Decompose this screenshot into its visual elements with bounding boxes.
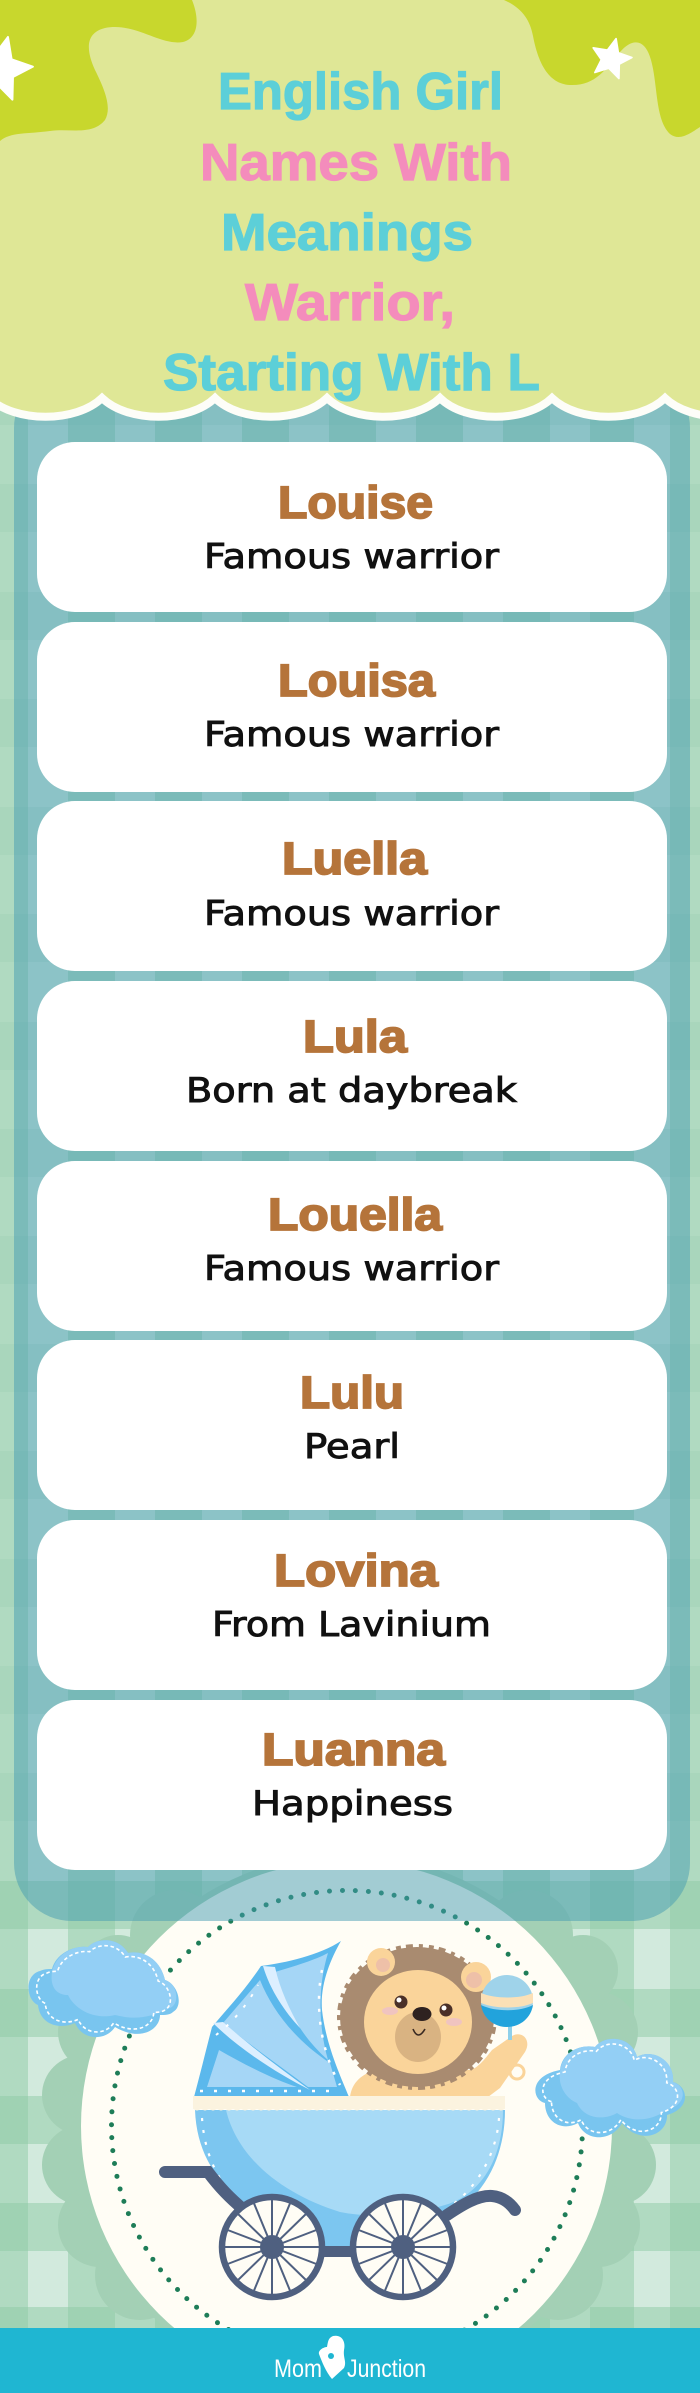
name card: Louella — [37, 1161, 667, 1331]
footer bar — [0, 2328, 700, 2393]
icon: white star right — [588, 34, 635, 80]
illustration: left wheel — [222, 2197, 322, 2297]
name card: Lulu: Lulu — [300, 1367, 404, 1418]
name card: Louise: Famous warrior — [204, 537, 499, 576]
name card: Luanna: Happiness — [252, 1784, 453, 1823]
illustration: pram canopy — [194, 1941, 349, 2097]
logo: MomJunction — [274, 2336, 426, 2383]
name card: Lovina: Lovina — [274, 1545, 439, 1596]
title: Names With — [200, 134, 512, 192]
icon: cloud left — [28, 1940, 179, 2037]
name card: Luella: Famous warrior — [204, 894, 499, 933]
name card: Luanna — [37, 1700, 667, 1870]
name card: Lula — [37, 981, 667, 1151]
illustration: lion cub — [339, 1946, 527, 2097]
title: Starting With L — [163, 344, 540, 402]
title: Warrior, — [245, 274, 455, 332]
name card: Louisa: Famous warrior — [204, 715, 499, 754]
name card: Louisa: Louisa — [278, 655, 436, 706]
name card: Louella: Famous warrior — [204, 1249, 499, 1288]
logo: MomJunction: Mom — [274, 2355, 322, 2383]
translucent teal panel — [14, 370, 690, 1921]
name card: Louise — [37, 442, 667, 612]
name card: Luanna: Luanna — [262, 1724, 446, 1775]
name card: Louella: Louella — [268, 1189, 443, 1240]
illustration: pram basket — [193, 2096, 505, 2247]
name card: Lula: Lula — [303, 1011, 408, 1062]
icon: cloud right — [535, 2039, 685, 2137]
logo: MomJunction: Junction — [347, 2355, 426, 2383]
cream circle — [81, 1860, 612, 2392]
dotted green ring — [112, 1890, 582, 2362]
header background — [0, 0, 700, 417]
name card: Louise: Louise — [278, 477, 433, 528]
title: English Girl — [218, 63, 503, 121]
name card: Lulu: Pearl — [304, 1427, 400, 1466]
illustration: rattle — [481, 1975, 533, 2040]
icon: white star left — [0, 29, 38, 103]
name card: Lovina — [37, 1520, 667, 1690]
illustration: pram handles and axle — [165, 2172, 515, 2257]
name card: Lovina: From Lavinium — [212, 1605, 491, 1644]
title: Meanings — [221, 204, 473, 262]
illustration: right wheel — [353, 2197, 453, 2297]
name card: Louisa — [37, 622, 667, 792]
scalloped green badge behind the circle — [42, 1854, 656, 2393]
name card: Luella: Luella — [282, 833, 428, 884]
header corner blob: left — [0, 0, 197, 141]
name card: Luella — [37, 801, 667, 971]
title — [163, 63, 540, 402]
name card: Lulu — [37, 1340, 667, 1510]
name card: Lula: Born at daybreak — [186, 1071, 518, 1110]
header corner blob: right — [504, 0, 700, 137]
